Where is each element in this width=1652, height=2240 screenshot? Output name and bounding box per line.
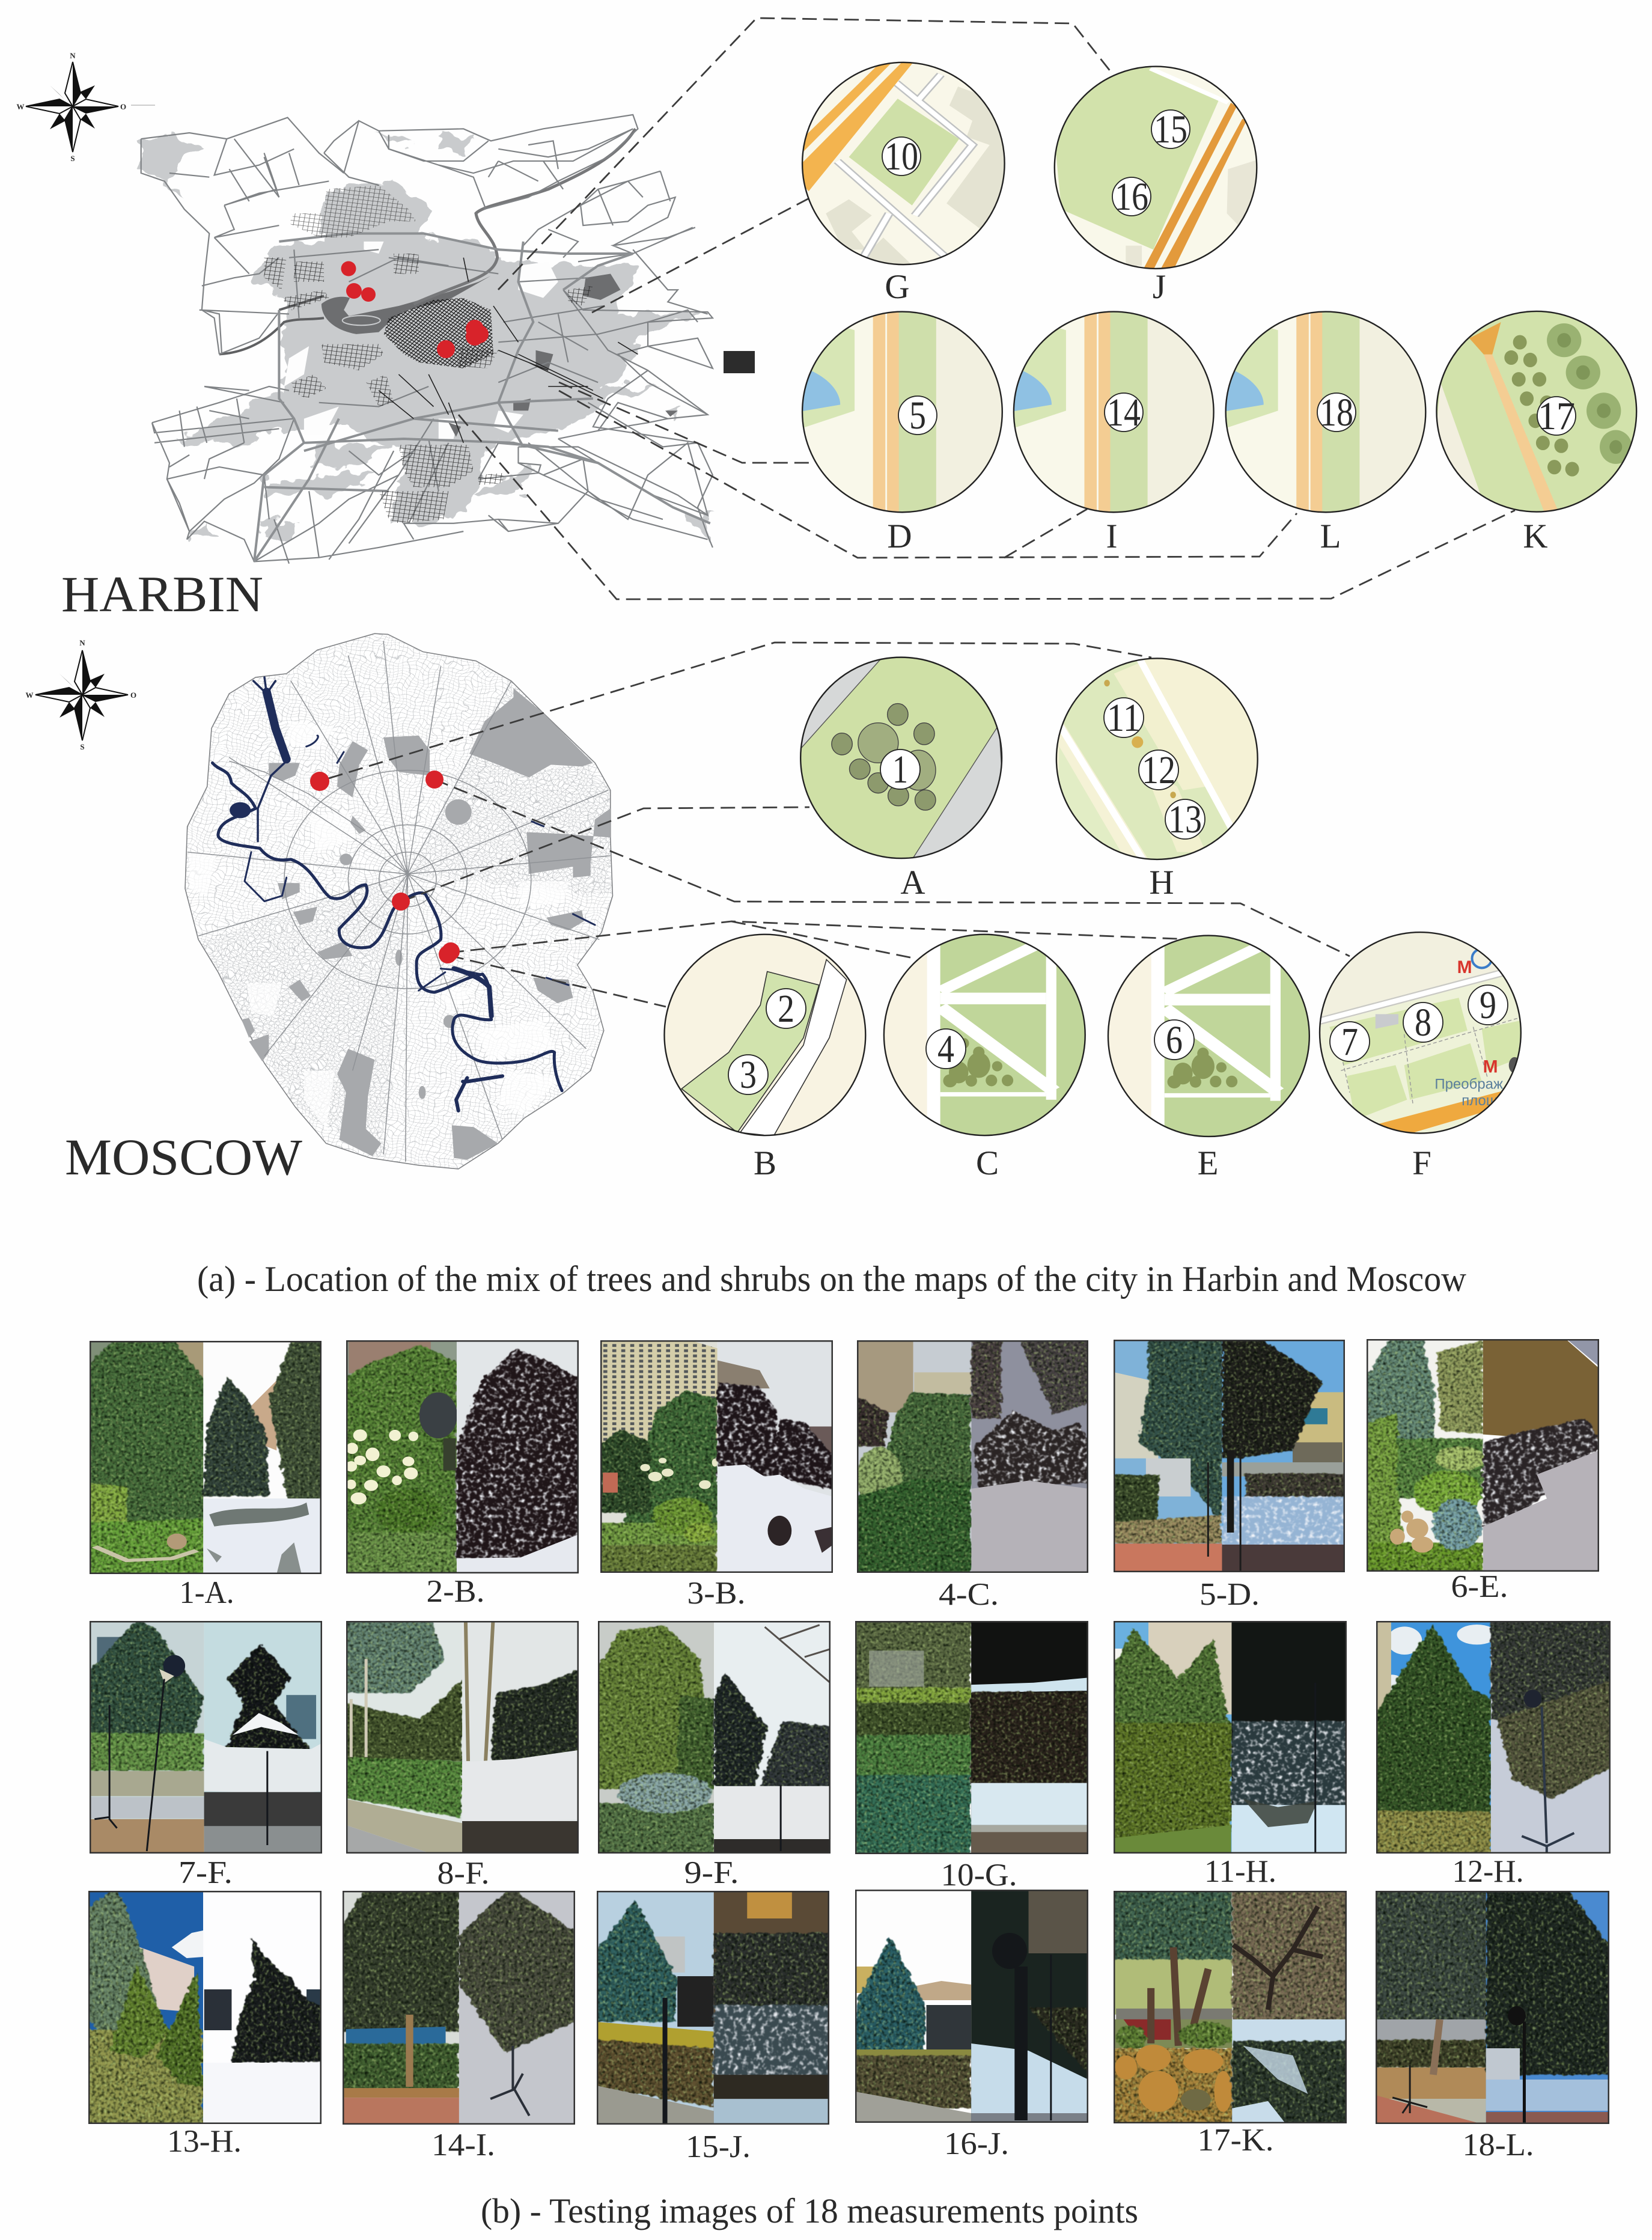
street texture clipped to the city outline [168, 619, 630, 1180]
marker 5 [898, 394, 937, 438]
label 8-F.: 8-F. [437, 1856, 489, 1891]
letter L: L [1320, 517, 1341, 555]
water and dark zones [322, 276, 491, 334]
map: Harbin road network [141, 115, 713, 564]
letter D: D [887, 517, 912, 555]
photo 10-G [847, 1617, 1093, 1857]
label 5-D.: 5-D. [1199, 1577, 1260, 1612]
white open patches [189, 718, 573, 1129]
urban area [141, 133, 710, 542]
map circle L [1224, 310, 1430, 516]
city outline [185, 633, 612, 1169]
map circle A [797, 656, 1008, 863]
extra minor roads [167, 129, 708, 561]
label 4-C.: 4-C. [939, 1577, 999, 1612]
photo 9-F [591, 1621, 837, 1856]
photo 3-B [600, 1340, 833, 1573]
marker 2 [766, 987, 806, 1031]
letter G: G [885, 268, 910, 306]
label 6-E.: 6-E. [1451, 1569, 1508, 1604]
letter C: C [976, 1144, 999, 1182]
photo 7-F [82, 1619, 322, 1854]
compass: Harbin: O [120, 102, 126, 111]
circle maps: Harbin [800, 60, 1642, 516]
compass: Moscow [25, 638, 136, 751]
label 7-F.: 7-F. [178, 1855, 233, 1890]
outer and arterial roads [141, 115, 713, 564]
label 15-J.: 15-J. [686, 2129, 751, 2164]
photo 8-F [339, 1618, 585, 1854]
red location dots: Moscow [310, 771, 460, 963]
marker 3: 3 [740, 1053, 757, 1097]
caption (b): (b) - Testing images of 18 measurements points [481, 2191, 1138, 2230]
marker 18: 18 [1320, 391, 1353, 435]
marker 14: 14 [1107, 391, 1141, 435]
dashed leader lines: Moscow [329, 642, 1350, 1007]
photo 4-C [857, 1340, 1088, 1573]
letter E: E [1198, 1144, 1218, 1182]
marker 6: 6 [1166, 1018, 1183, 1062]
photo 1-A [90, 1341, 322, 1574]
label 18-L.: 18-L. [1463, 2128, 1534, 2162]
map circle I [1011, 310, 1218, 516]
photo 16-J [847, 1890, 1093, 2123]
compass: Moscow: S [80, 742, 85, 751]
photo 5-D [1114, 1340, 1345, 1572]
marker 6 [1154, 1018, 1194, 1062]
label 10-G.: 10-G. [941, 1858, 1017, 1893]
photo 18-L [1368, 1887, 1617, 2124]
map circle E [1102, 933, 1315, 1141]
photo 17-K [1106, 1887, 1352, 2128]
compass: Harbin: W [17, 102, 24, 111]
red location dots: Harbin [341, 261, 489, 358]
label 11-H.: 11-H. [1204, 1854, 1276, 1889]
photo 11-H [1106, 1621, 1351, 1854]
gray parks [242, 688, 611, 1160]
marker 16: 16 [1115, 175, 1148, 219]
marker 8: 8 [1415, 1001, 1431, 1045]
marker 8 [1403, 1001, 1443, 1045]
letter K: K [1523, 517, 1548, 555]
letter J: J [1153, 268, 1166, 306]
radial roads and rings [187, 641, 611, 1162]
map circle J [1053, 64, 1260, 272]
letter A: A [900, 864, 925, 902]
photo 6-E [1360, 1337, 1604, 1575]
map circle H [1053, 656, 1260, 863]
marker 1 [880, 748, 920, 792]
title: MOSCOW: MOSCOW [65, 1128, 302, 1186]
circle maps: Moscow [663, 656, 1525, 1141]
marker 4: 4 [937, 1027, 954, 1071]
marker 5: 5 [909, 394, 926, 438]
marker 7 [1330, 1020, 1370, 1064]
photo 15-J [590, 1891, 836, 2125]
letter H: H [1149, 864, 1174, 902]
white gaps in the urban area [284, 242, 558, 439]
map circle D [800, 310, 1007, 516]
map circle F: М [1457, 957, 1472, 977]
legend block: black rectangle [724, 351, 755, 373]
marker 13: 13 [1168, 798, 1202, 841]
caption (a): (a) - Location of the mix of trees and shrubs on the maps of the city in Harbin and Moscow [197, 1259, 1467, 1299]
compass: Harbin: S [70, 154, 75, 163]
marker 9: 9 [1480, 983, 1496, 1027]
letter F: F [1412, 1144, 1431, 1182]
title: HARBIN: HARBIN [61, 566, 263, 623]
compass: Moscow: W [25, 691, 34, 700]
marker 9 [1468, 983, 1508, 1027]
label 13-H.: 13-H. [167, 2124, 242, 2159]
marker 2: 2 [778, 987, 794, 1031]
marker 12: 12 [1142, 748, 1175, 792]
letter I: I [1106, 517, 1117, 555]
number markers and letters: Moscow [728, 696, 1508, 1182]
label 12-H.: 12-H. [1452, 1854, 1524, 1889]
marker 10: 10 [885, 135, 918, 179]
map circle F: Преображ [1434, 1076, 1503, 1093]
marker 17: 17 [1538, 394, 1575, 438]
compass: Moscow: N [79, 638, 85, 647]
photo 12-H [1370, 1617, 1618, 1856]
photo 2-B [346, 1340, 579, 1573]
photo 13-H [82, 1887, 326, 2128]
marker 3 [728, 1053, 768, 1097]
rivers [212, 677, 595, 1111]
map circle G [800, 60, 1010, 268]
marker 1: 1 [892, 748, 908, 792]
label 16-J.: 16-J. [944, 2126, 1009, 2161]
compass: Moscow: O [130, 691, 136, 700]
label 14-I.: 14-I. [431, 2128, 495, 2162]
label 3-B.: 3-B. [687, 1576, 745, 1611]
dashed leader lines: Harbin [459, 18, 1515, 599]
map circle F: площ [1462, 1093, 1498, 1109]
marker 7: 7 [1341, 1020, 1358, 1064]
marker 4 [926, 1027, 966, 1071]
map: Moscow [184, 633, 613, 1170]
marker 15: 15 [1154, 108, 1187, 151]
photo 14-I [335, 1887, 580, 2125]
marker 11: 11 [1107, 696, 1141, 740]
map circle B [663, 932, 867, 1138]
label 1-A.: 1-A. [179, 1575, 234, 1610]
label 17-K.: 17-K. [1197, 2123, 1274, 2158]
compass: Harbin: N [70, 51, 76, 60]
number markers and letters: Harbin [882, 108, 1576, 555]
label 2-B.: 2-B. [427, 1574, 484, 1609]
map circle K [1432, 308, 1642, 516]
label 9-F.: 9-F. [684, 1855, 739, 1890]
map circle C [878, 932, 1091, 1140]
map circle F [1318, 930, 1525, 1136]
compass: Harbin [17, 51, 155, 163]
map circle F: М [1483, 1057, 1498, 1076]
letter B: B [754, 1144, 776, 1182]
street grids [264, 185, 638, 523]
